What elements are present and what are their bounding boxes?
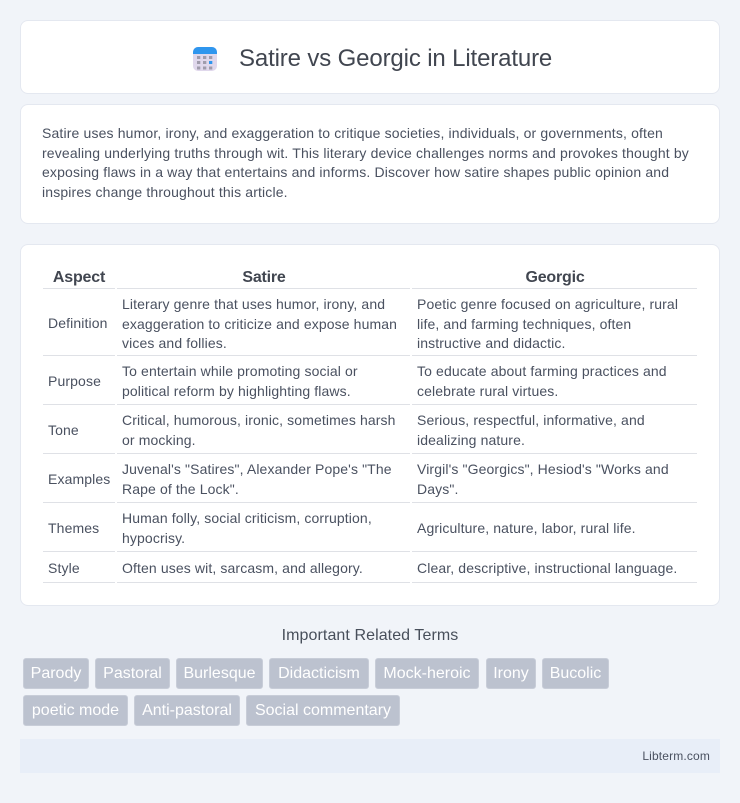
icon: calendar bbox=[193, 47, 217, 71]
row: purpose: political reform by highlighting flaws. bbox=[122, 382, 351, 398]
table header: Satire bbox=[242, 269, 286, 286]
row: definition: Literary genre that uses humor, irony, and bbox=[122, 296, 385, 312]
tag group: related terms: Pastoral bbox=[103, 665, 162, 682]
row: themes bbox=[48, 510, 636, 546]
panel: title header bbox=[20, 20, 720, 94]
text block: intro: revealing underlying truths through wit. This literary device challenges norms and provokes thought by bbox=[42, 144, 689, 160]
row: style: Often uses wit, sarcasm, and allegory. bbox=[122, 560, 363, 576]
footer bar bbox=[20, 739, 720, 773]
tag group: related terms: Burlesque bbox=[183, 665, 256, 682]
panel: comparison table bbox=[20, 244, 720, 606]
text block: intro: Satire uses humor, irony, and exaggeration to critique societies, individuals, or governments, often bbox=[42, 125, 663, 141]
tag group: related terms: Mock-heroic bbox=[383, 665, 471, 682]
row: examples: Days". bbox=[417, 480, 458, 496]
table header bbox=[53, 269, 585, 286]
row: examples: Rape of the Lock". bbox=[122, 480, 239, 496]
tag group: related terms: Social commentary bbox=[255, 702, 391, 719]
footer credit: Libterm.com bbox=[642, 749, 710, 763]
row: style bbox=[48, 560, 677, 576]
row: purpose: celebrate rural virtues. bbox=[417, 382, 558, 398]
row: definition: exaggeration to criticize and expose human bbox=[122, 316, 397, 332]
row: tone: or mocking. bbox=[122, 432, 196, 448]
row: definition: vices and follies. bbox=[122, 335, 227, 351]
tag group: related terms: Parody bbox=[31, 665, 81, 682]
heading: related terms: Important Related Terms bbox=[282, 627, 458, 644]
row: style: Clear, descriptive, instructional language. bbox=[417, 560, 677, 576]
row: purpose: To entertain while promoting social or bbox=[122, 363, 358, 379]
row: themes: Themes bbox=[48, 520, 99, 536]
row: purpose bbox=[48, 363, 667, 399]
tag group: related terms: Irony bbox=[493, 665, 529, 682]
row: purpose: Purpose bbox=[48, 373, 101, 389]
row: themes: Agriculture, nature, labor, rural life. bbox=[417, 520, 636, 536]
row: purpose: To educate about farming practices and bbox=[417, 363, 667, 379]
row: tone: Tone bbox=[48, 422, 79, 438]
row: definition: instructive and didactic. bbox=[417, 335, 566, 351]
row: definition: Definition bbox=[48, 315, 108, 331]
tag group: related terms: Bucolic bbox=[550, 665, 601, 682]
text block: intro: inspires change throughout this article. bbox=[42, 184, 288, 200]
panel: introduction bbox=[20, 104, 720, 224]
row: definition: life, and farming techniques, often bbox=[417, 316, 631, 332]
row: examples bbox=[48, 461, 669, 497]
tag group: related terms: Anti-pastoral bbox=[142, 702, 232, 719]
row: examples: Virgil's "Georgics", Hesiod's "Works and bbox=[417, 461, 669, 477]
text block: intro: exposing flaws in a way that entertains and informs. Discover how satire shapes public opinion and bbox=[42, 164, 669, 180]
row: tone: idealizing nature. bbox=[417, 432, 525, 448]
row: tone bbox=[48, 412, 645, 448]
row: themes: Human folly, social criticism, corruption, bbox=[122, 510, 372, 526]
tag group: related terms: poetic mode bbox=[32, 702, 119, 719]
title: Satire vs Georgic in Literature bbox=[239, 45, 552, 72]
row: tone: Critical, humorous, ironic, sometimes harsh bbox=[122, 412, 396, 428]
row: definition: Poetic genre focused on agriculture, rural bbox=[417, 296, 678, 312]
table header: Aspect bbox=[53, 269, 105, 286]
text block: intro bbox=[42, 125, 689, 200]
tag group: related terms: Didacticism bbox=[278, 665, 360, 682]
row: style: Style bbox=[48, 560, 80, 576]
row: themes: hypocrisy. bbox=[122, 530, 185, 546]
table header: Georgic bbox=[525, 269, 585, 286]
tag group: related terms bbox=[23, 658, 609, 726]
row: definition bbox=[48, 296, 678, 351]
row: tone: Serious, respectful, informative, and bbox=[417, 412, 645, 428]
row: examples: Juvenal's "Satires", Alexander Pope's "The bbox=[122, 461, 392, 477]
row: examples: Examples bbox=[48, 471, 110, 487]
